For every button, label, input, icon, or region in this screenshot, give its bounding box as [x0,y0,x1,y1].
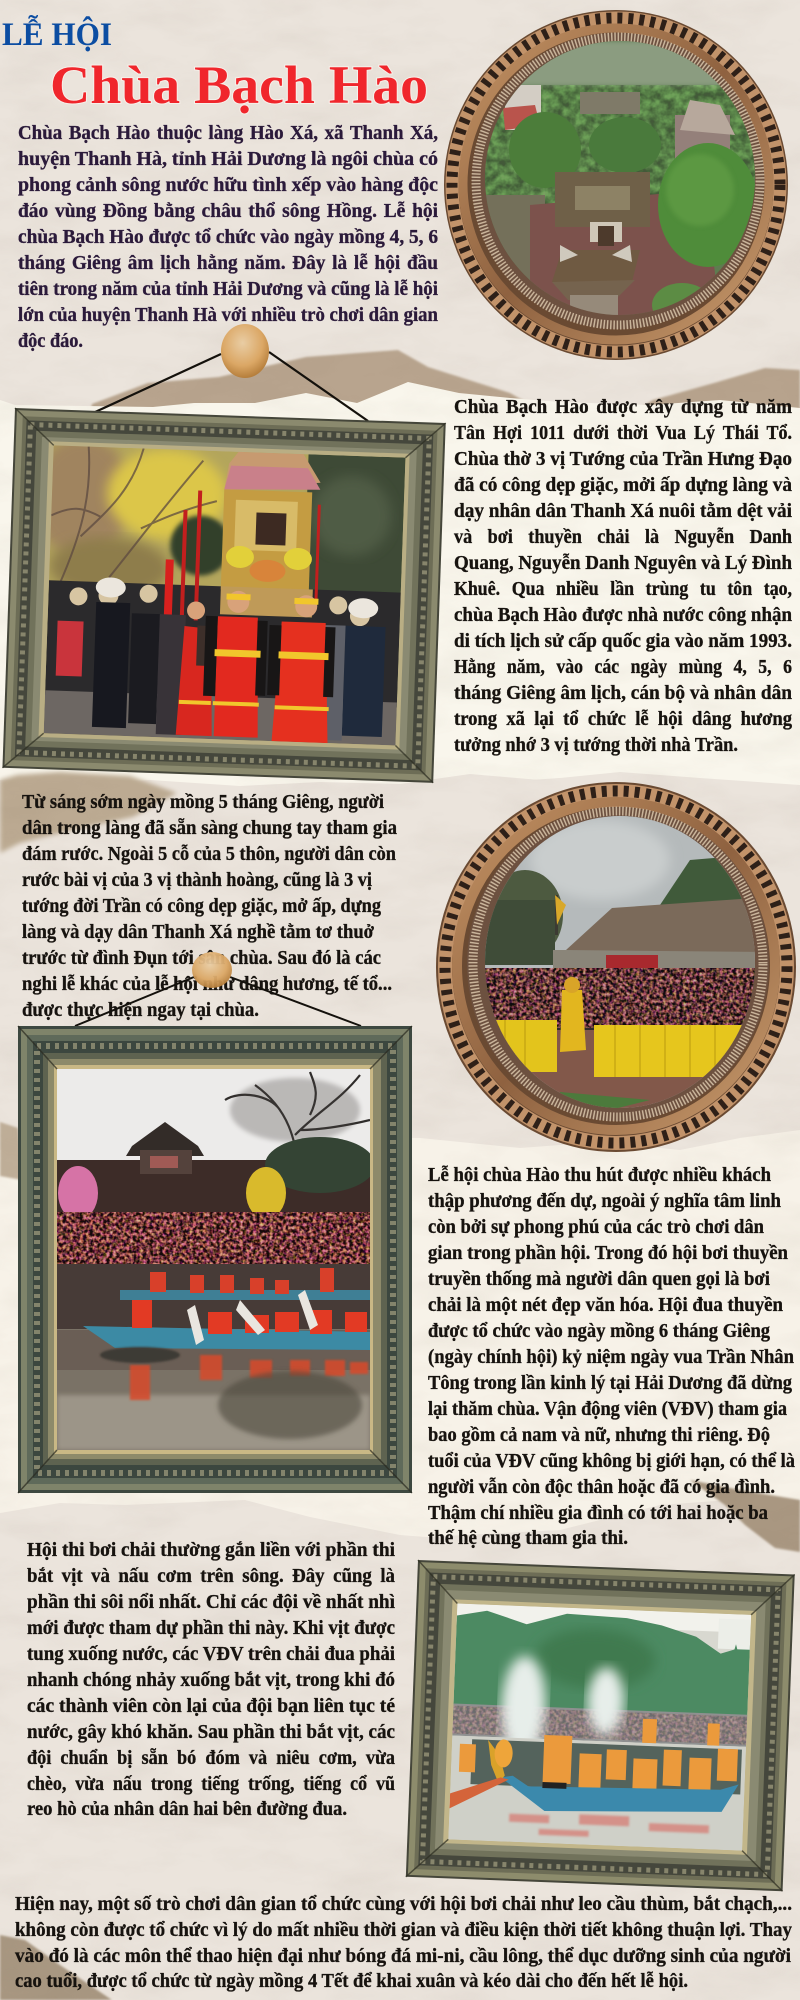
pin 1 [221,324,269,378]
text block: history: Quang, Nguyễn Danh Nguyên và Lý Đình [454,552,792,574]
text block: duck catching contest: các thành viên còn lại của đội bạn liên tục té [27,1695,395,1717]
frame 2 hanging wires [75,977,361,1026]
text block: history [454,396,792,756]
text block: festival games: còn bởi sự phong phú của các trò chơi dân [428,1216,764,1238]
round frame with ceremony photo [436,782,796,1152]
text block: intro: độc đáo. [18,330,83,352]
text block: intro [18,122,438,352]
text block: procession: rước bài vị của 3 vị thành hoàng, cũng là 3 vị [22,869,372,891]
text block: history: đã có công dẹp giặc, mởi ấp dựng làng và [454,474,792,496]
title: Chùa Bạch Hào: Chùa Bạch Hào [50,55,428,115]
text block: history: tháng Giêng âm lịch, cán bộ và nhân dân [454,682,792,704]
text block: intro: Chùa Bạch Hào thuộc làng Hào Xá, xã Thanh Xá, [18,122,438,144]
text block: duck catching contest: tung xuống nước, các VĐV trên chải đua phải [27,1643,395,1665]
text block: procession: tướng đời Trần có công dẹp giặc, mở ấp, dựng [22,895,381,917]
text block: duck catching contest: đội chuẩn bị sẵn bó đóm và niêu cơm, vừa [27,1747,395,1769]
text block: duck catching contest: nước, gây khó khăn. Sau phần thi bắt vịt, các [27,1721,395,1743]
text block: modern activities [15,1893,792,1992]
text block: festival games: truyền thống mà người dân quen gọi là bơi [428,1268,770,1290]
text block: festival games: Thậm chí nhiều gia đình có tới hai hoặc ba [428,1502,768,1524]
text block: duck catching contest [27,1539,395,1820]
text block: procession [22,791,397,1021]
text block: procession: được thực hiện ngay tại chùa. [22,999,259,1021]
text block: festival games [428,1164,795,1549]
text block: intro: đáo vùng Đồng bằng châu thổ sông Hồng. Lễ hội [18,200,438,222]
text block: duck catching contest: Hội thi bơi chải thường gắn liền với phần thi [27,1539,395,1561]
text block: history: tưởng nhớ 3 vị tướng thời nhà Trần. [454,734,738,756]
text block: festival games: chải là một nét đẹp văn hóa. Hội đua thuyền [428,1294,783,1316]
picture frame 3: boat with water jets [406,1560,795,1891]
text block: festival games: thế hệ cùng tham gia thi. [428,1527,628,1549]
text block: intro: chùa Bạch Hào được tổ chức vào ngày mồng 4, 5, 6 [18,226,438,248]
text block: duck catching contest: phần thi sôi nổi nhất. Chỉ các đội về nhất nhì [27,1591,395,1613]
text block: festival games: thập phương đến dự, ngoài ý nghĩa tâm linh [428,1190,781,1212]
text block: duck catching contest: nhanh chóng nhảy xuống bắt vịt, trong khi đó [27,1669,395,1691]
text block: intro: tiên trong năm của tỉnh Hải Dương và cũng là lễ hội [18,278,438,300]
text block: procession: trước từ đình Đụn tới sân chùa. Sau đó là các [22,947,381,969]
text block: modern activities: cao tuổi, được tổ chức từ ngày mồng 4 Tết để khai xuân và kéo dài cho đến hết lễ hội. [15,1970,688,1992]
text block: history: dạy nhân dân Thanh Xá nuôi tằm dệt vải [454,500,792,522]
text block: duck catching contest: bắt vịt và nấu cơm trên sông. Đây cũng là [27,1565,395,1587]
text block: intro: phong cảnh sông nước hữu tình xếp vào hàng độc [18,174,438,196]
frame 1 hanging wires [93,352,368,421]
text block: procession: dân trong làng đã sẵn sàng chung tay tham gia [22,817,397,839]
text block: procession: đám rước. Ngoài 5 cỗ của 5 thôn, người dân còn [22,843,396,865]
text block: history: Chùa thờ 3 vị Tướng của Trần Hưng Đạo [454,448,792,470]
text block: duck catching contest: reo hò của nhân dân hai bên đường đua. [27,1798,347,1820]
text block: history: Chùa Bạch Hào được xây dựng từ năm [454,396,792,418]
text block: history: di tích lịch sử cấp quốc gia vào năm 1993. [454,630,792,652]
title: LỄ HỘI: LỄ HỘI [2,14,112,53]
round frame with aerial temple photo [444,10,788,360]
text block: intro: huyện Thanh Hà, tỉnh Hải Dương là ngôi chùa có [18,148,438,170]
text block: procession: nghi lễ khác của lễ hội như dâng hương, tế tổ... [22,973,392,995]
picture frame 2: boat race [18,1026,412,1493]
text block: intro: tháng Giêng âm lịch hằng năm. Đây là lễ hội đầu [18,252,438,274]
text block: duck catching contest: chèo, vừa nấu trong tiếng trống, tiếng cổ vũ [27,1773,395,1795]
text block: duck catching contest: mới được tham dự phần thi này. Khi vịt được [27,1617,395,1639]
text block: procession: làng và dạy dân Thanh Xá nghề tằm tơ thuở [22,921,374,943]
text block: festival games: Lễ hội chùa Hào thu hút được nhiều khách [428,1164,771,1186]
text block: intro: lớn của huyện Thanh Hà với nhiều trò chơi dân gian [18,304,438,326]
text block: festival games: người vẫn còn độc thân hoặc đã có gia đình. [428,1476,775,1498]
text block: modern activities: vào đó là các môn thể thao hiện đại như bóng đá mi-ni, cầu lông, thể dục dưỡng sinh của người [15,1945,791,1967]
picture frame 1: palanquin procession [2,408,446,783]
pin 2 [192,952,232,988]
text block: festival games: bao gồm cả nam và nữ, nhưng thi riêng. Độ [428,1424,770,1446]
text block: festival games: được tổ chức vào ngày mồng 6 tháng Giêng [428,1320,770,1342]
text block: procession: Từ sáng sớm ngày mồng 5 tháng Giêng, người [22,791,384,813]
